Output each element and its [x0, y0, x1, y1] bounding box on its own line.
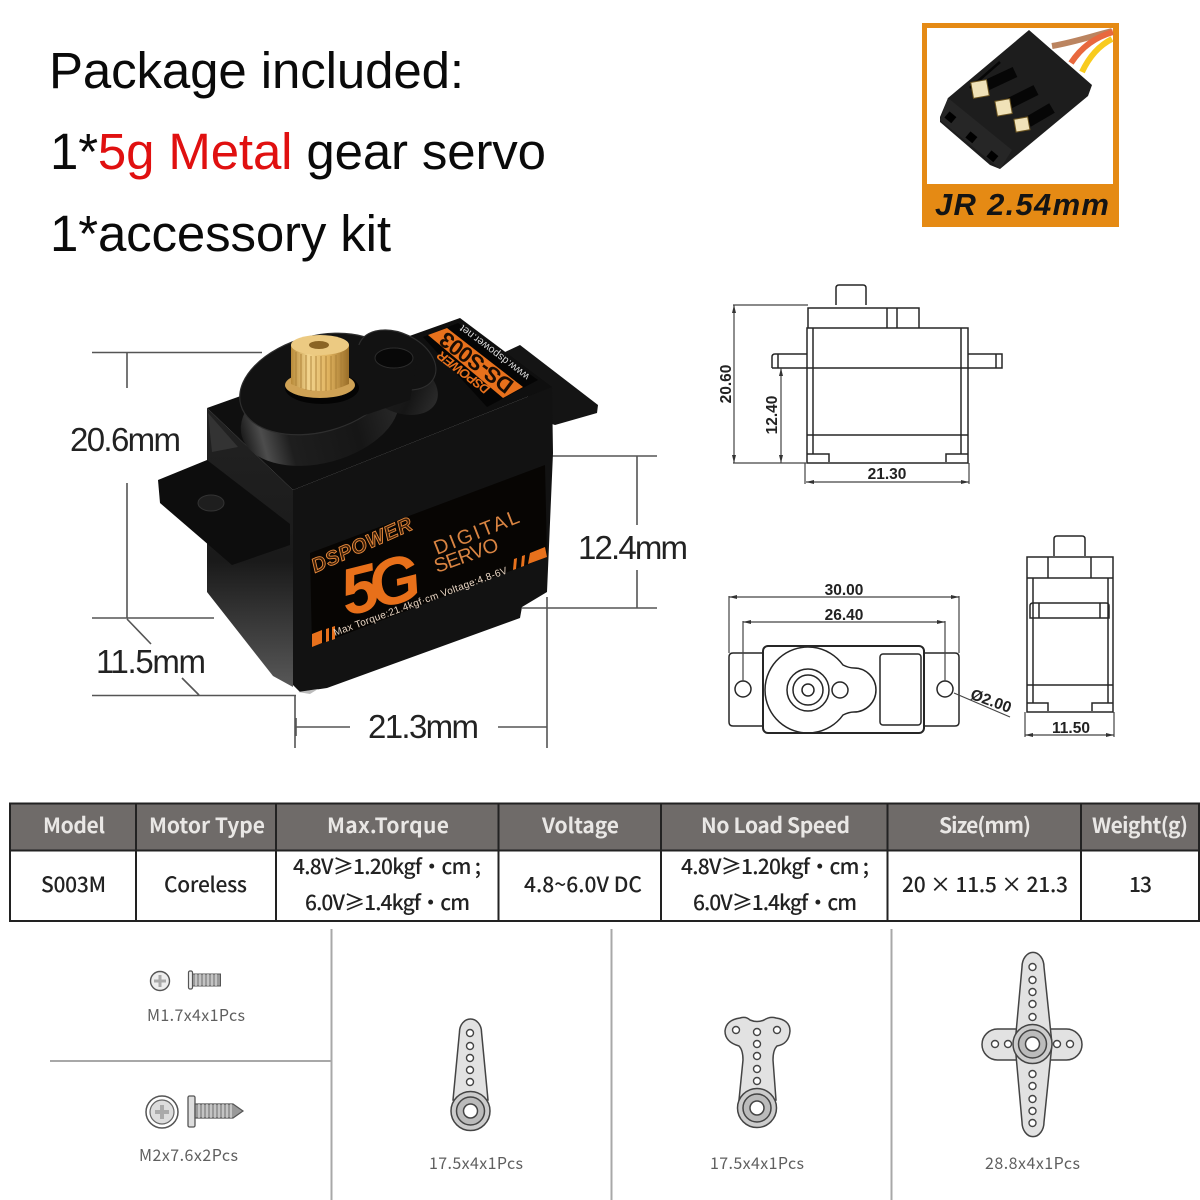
mounting hole: [198, 495, 224, 511]
model number: DS-S003: [434, 327, 518, 398]
arrowheads: [729, 595, 959, 624]
screw side view: [188, 1096, 243, 1127]
accessory: single arm horn: [429, 1019, 523, 1174]
cross bar: [982, 1029, 1082, 1060]
dimension lines: [1025, 712, 1114, 737]
caption: M2x7.6x2Pcs: [139, 1142, 238, 1166]
brass shaft: [291, 345, 349, 391]
header: weight: Weight(g): [1092, 810, 1188, 840]
line: servo: 1*5g Metal gear servo: [50, 123, 546, 180]
screw head view: [150, 972, 170, 990]
mounting holes: [735, 681, 953, 697]
cell: size: 20 × 11.5 × 21.3: [902, 869, 1068, 899]
header: size: Size(mm): [939, 810, 1031, 840]
arrowheads: [732, 305, 969, 484]
header: no load speed: No Load Speed: [701, 810, 850, 840]
drawing outline: [772, 285, 1002, 463]
sticker brand: DSPOWER: [308, 513, 416, 578]
horn join: [340, 345, 420, 420]
connector body: [940, 30, 1092, 169]
brass collar: [285, 372, 355, 398]
screw side view: [188, 971, 220, 989]
technical drawing: front view: [718, 285, 1002, 484]
top face: [207, 318, 552, 490]
website: www.dspower.net: [457, 322, 533, 383]
header band: [10, 803, 1199, 850]
label: shaft height: 12.4mm: [578, 529, 688, 566]
accessory: M1.7 screw: [147, 971, 245, 1026]
dimension hole diameter: Ø2.00: [968, 686, 1014, 717]
servo rings: [787, 669, 848, 711]
top logo: DSPOWER: [434, 348, 493, 397]
connector latch slots: [970, 62, 1052, 122]
specification table: [10, 803, 1199, 921]
dimension 20.60: 20.60: [718, 365, 735, 403]
connector front face: [940, 98, 1012, 169]
lobe button: [375, 348, 413, 368]
shaft hole: [309, 341, 329, 349]
panel: JR connector: [922, 23, 1119, 227]
arm hub: [1013, 1024, 1052, 1064]
label: height: 20.6mm: [70, 421, 181, 458]
dimension lines: [92, 352, 657, 748]
cell: torque line 1: 4.8V≥1.20kgf·cm ;: [293, 851, 481, 881]
sticker servo: SERVO: [431, 534, 502, 578]
base feet highlight: [298, 689, 318, 694]
top label orange band: [428, 328, 523, 398]
dimension lines: [733, 305, 969, 484]
screw head view: [146, 1096, 178, 1128]
outer tabs: [729, 653, 959, 726]
cell: speed line 1: 4.8V≥1.20kgf·cm ;: [681, 851, 869, 881]
arm body: [725, 1017, 790, 1100]
connector wires: [1052, 31, 1113, 72]
shaft top: [291, 335, 349, 355]
accessory: M2 screw: [139, 1096, 243, 1166]
cell: model: S003M: [41, 869, 106, 899]
caption: 28.8x4x1Pcs: [985, 1150, 1080, 1174]
cell: voltage: 4.8~6.0V DC: [524, 869, 642, 899]
header: max torque: Max.Torque: [327, 810, 449, 840]
servo photo: [158, 317, 598, 694]
front face: [293, 387, 553, 692]
line: package included: Package included:: [49, 42, 464, 99]
connector pins: [971, 80, 1030, 132]
arm hub: [451, 1092, 490, 1130]
main body: [763, 646, 924, 733]
dimension 12.40: 12.40: [764, 396, 781, 434]
cell: speed line 2: 6.0V≥1.4kgf·cm: [693, 887, 857, 917]
dimension lines and labels around servo photo: [70, 352, 688, 748]
header: motor type: Motor Type: [149, 810, 265, 840]
horn top face: [228, 317, 446, 451]
label: width: 21.3mm: [368, 708, 479, 745]
arm body: [453, 1019, 488, 1100]
drawing outline: [1027, 536, 1113, 712]
vertical bar: [1015, 952, 1052, 1137]
top label panel: [423, 323, 538, 407]
left mounting tab: [158, 460, 290, 565]
left side face: [207, 408, 293, 687]
sticker digital: DIGITAL: [431, 506, 523, 560]
accessory: T arm horn: [710, 1017, 804, 1174]
line: accessory kit: 1*accessory kit: [50, 205, 391, 262]
label: depth: 11.5mm: [96, 643, 206, 680]
horn wall: [229, 343, 448, 482]
cell: weight: 13: [1129, 869, 1152, 899]
caption: 17.5x4x1Pcs: [710, 1150, 804, 1174]
caption: M1.7x4x1Pcs: [147, 1002, 245, 1026]
connector sockets: [944, 111, 998, 162]
label recess: [880, 654, 921, 725]
dimension 30.00: 30.00: [825, 582, 863, 599]
dimension 11.50: 11.50: [1052, 720, 1090, 737]
orange frame: [922, 23, 1119, 227]
technical drawing: side view: [1025, 536, 1114, 737]
dimension 21.30: 21.30: [868, 466, 906, 483]
right mounting tab: [505, 345, 598, 425]
accessory: cross arm horn: [982, 952, 1082, 1174]
dimension lines: [729, 596, 1010, 717]
technical drawing: top view: [729, 582, 1014, 733]
dimension 26.40: 26.40: [825, 607, 863, 624]
arm holes: [732, 1026, 780, 1084]
sticker specs: Max Torque:21.4kgf·cm Voltage:4.8-6V: [332, 565, 509, 639]
accessory dividers: [50, 929, 892, 1200]
arm hub: [738, 1088, 776, 1128]
connector label: JR 2.54mm: [935, 187, 1109, 222]
arm holes: [466, 1030, 474, 1086]
front sticker: [310, 465, 547, 647]
caption: 17.5x4x1Pcs: [429, 1150, 523, 1174]
cell: motor type: Coreless: [164, 869, 247, 899]
table grid: [10, 803, 1199, 921]
heading: package included: [49, 42, 546, 262]
side gloss patch: [208, 413, 238, 452]
arrowheads: [1025, 733, 1114, 737]
cell: torque line 2: 6.0V≥1.4kgf·cm: [305, 887, 470, 917]
arm holes: [992, 964, 1074, 1126]
header: model: Model: [43, 810, 105, 840]
brass base ring: [285, 372, 359, 404]
sticker orange stripes: [312, 547, 547, 647]
photo background: [927, 28, 1113, 184]
header: voltage: Voltage: [541, 810, 619, 840]
horn outline: [765, 647, 876, 733]
sticker 5G: 5G: [332, 538, 428, 630]
shaft splines: [296, 352, 341, 391]
